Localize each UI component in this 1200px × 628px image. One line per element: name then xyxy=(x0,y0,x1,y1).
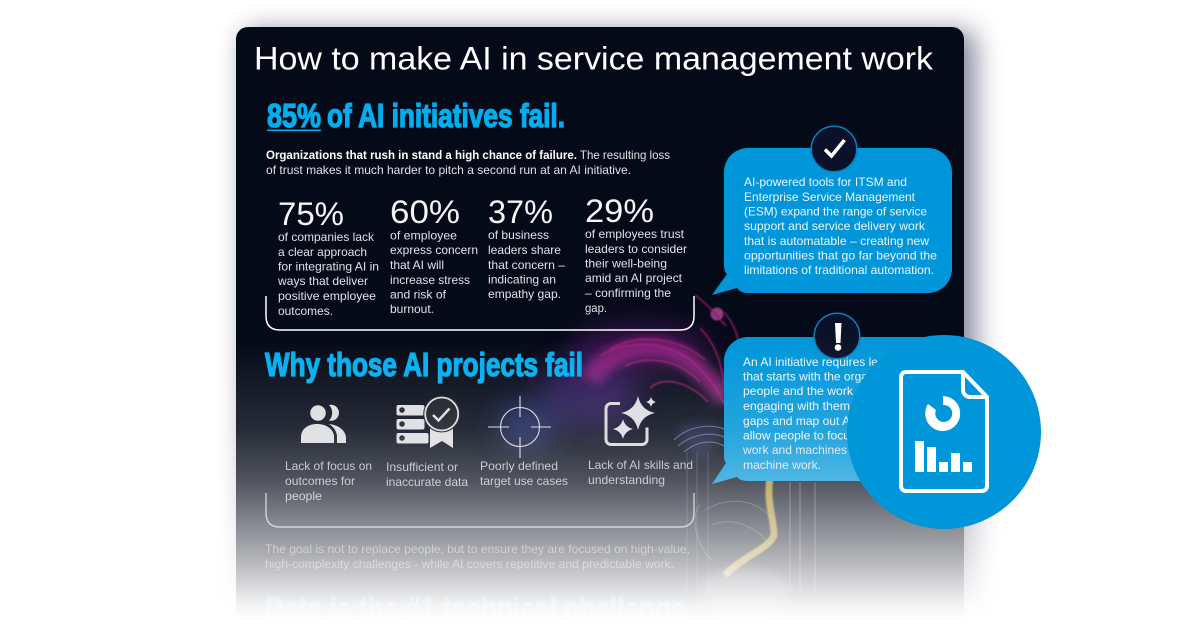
icon: target crosshair xyxy=(488,396,551,458)
stat: 75%: 75% xyxy=(278,196,344,232)
heading: 85% of AI initiatives fail: of AI initiatives fail. xyxy=(327,97,565,134)
cause: insufficient data: inaccurate data xyxy=(386,475,468,489)
callout: AI-powered tools: limitations of traditional automation. xyxy=(744,263,934,277)
bottom fade overlay xyxy=(150,340,1100,628)
stat: 37%: leaders share xyxy=(488,243,561,257)
stat: 60% xyxy=(390,194,478,316)
stat: 60%: and risk of xyxy=(390,288,447,302)
stat: 37%: that concern – xyxy=(488,258,565,272)
cause: insufficient data: Insufficient or xyxy=(386,460,458,474)
stat: 60%: burnout. xyxy=(390,302,434,316)
icon: AI sparkles xyxy=(606,396,656,444)
icon: people xyxy=(301,405,346,443)
callout: AI initiative: that starts with the orga xyxy=(743,370,868,384)
callout: AI initiative: An AI initiative requires le xyxy=(743,355,878,369)
callout: AI-powered tools: AI-powered tools for ITSM and xyxy=(744,175,907,189)
icon: check badge xyxy=(811,126,857,172)
title: How to make AI in service management work xyxy=(254,40,934,76)
heading: data challenge: Data is the #1 technical challenge xyxy=(265,590,686,627)
goal paragraph xyxy=(265,542,690,571)
cause: lack of AI skills xyxy=(588,458,693,487)
stat: 29%: their well-being xyxy=(585,256,667,270)
callout: AI-powered tools: that is automatable – creating new xyxy=(744,234,929,248)
cause: insufficient data xyxy=(386,460,468,489)
stat: 60%: express concern xyxy=(390,243,478,257)
stat: 37%: indicating an xyxy=(488,272,556,286)
smoke artwork xyxy=(498,295,815,616)
stat: 75%: of companies lack xyxy=(278,230,375,244)
cause: lack of AI skills: Lack of AI skills and xyxy=(588,458,693,472)
stat: 29%: leaders to consider xyxy=(585,242,687,256)
cause: lack of focus: outcomes for xyxy=(285,474,355,488)
cause: lack of focus: Lack of focus on xyxy=(285,459,372,473)
callout: AI-powered tools: Enterprise Service Management xyxy=(744,190,916,204)
callout: AI initiative: work and machines xyxy=(742,443,847,457)
stat: 75% xyxy=(277,196,379,318)
stat: 60%: increase stress xyxy=(390,273,470,287)
heading: why those AI projects fail: Why those AI projects fail xyxy=(265,346,583,383)
intro paragraph: of trust makes it much harder to pitch a second run at an AI initiative. xyxy=(266,163,631,177)
stat: 37%: 37% xyxy=(488,194,553,230)
stat: 37% xyxy=(488,194,565,301)
cause: poorly defined use cases xyxy=(480,459,568,488)
stat: 75%: positive employee xyxy=(278,289,376,303)
stat: 37%: empathy gap. xyxy=(488,287,561,301)
stat: 29%: 29% xyxy=(585,193,654,229)
heading: 85% of AI initiatives fail: 85% xyxy=(267,97,321,134)
stat: 29%: gap. xyxy=(585,301,607,315)
stat: 29% xyxy=(585,193,687,315)
stat: 37%: of business xyxy=(488,228,549,242)
icon: data quality badge xyxy=(396,396,460,448)
big circle document badge xyxy=(847,335,1041,529)
callout: AI initiative: machine work. xyxy=(743,458,821,472)
callout: AI initiative: gaps and map out A xyxy=(743,414,850,428)
callout: AI initiative xyxy=(712,337,952,484)
stat: 60%: that AI will xyxy=(390,258,444,272)
cause: lack of AI skills: understanding xyxy=(588,473,665,487)
stat: 60%: 60% xyxy=(390,194,460,230)
card shadow xyxy=(244,30,976,628)
stat: 29%: of employees trust xyxy=(585,227,685,241)
goal paragraph: high-complexity challenges - while AI covers repetitive and predictable work. xyxy=(265,557,674,571)
cause: poorly defined use cases: Poorly defined xyxy=(480,459,558,473)
cause: poorly defined use cases: target use cases xyxy=(480,474,568,488)
callout: AI-powered tools xyxy=(712,148,952,295)
stat: 75%: a clear approach xyxy=(278,245,367,259)
callout: AI-powered tools: (ESM) expand the range of service xyxy=(744,204,927,218)
causes bracket xyxy=(266,493,694,527)
stats bracket xyxy=(266,296,694,330)
icon: exclamation badge xyxy=(814,313,860,359)
goal paragraph: The goal is not to replace people, but to ensure they are focused on high-value, xyxy=(265,542,690,556)
stat: 75%: ways that deliver xyxy=(277,274,368,288)
cause: lack of focus: people xyxy=(285,489,322,503)
heading: 85% of AI initiatives fail xyxy=(267,97,565,134)
stat: 75%: for integrating AI in xyxy=(278,260,379,274)
callout: AI-powered tools: opportunities that go far beyond the xyxy=(744,248,937,262)
stat: 60%: of employee xyxy=(390,228,457,242)
callout: AI-powered tools: support and service delivery work xyxy=(744,219,926,233)
stat: 29%: – confirming the xyxy=(585,286,671,300)
cause: lack of focus xyxy=(285,459,372,503)
callout: AI initiative: people and the work xyxy=(743,384,854,398)
callout: AI initiative: engaging with them xyxy=(743,399,850,413)
stat: 29%: amid an AI project xyxy=(585,271,683,285)
callout: AI initiative: allow people to focu xyxy=(743,428,850,442)
intro paragraph: Organizations that rush in stand a high chance of failure. The resulting loss xyxy=(266,148,670,162)
stat: 75%: outcomes. xyxy=(278,304,333,318)
intro paragraph xyxy=(266,148,670,177)
dark infographic card xyxy=(236,27,964,628)
